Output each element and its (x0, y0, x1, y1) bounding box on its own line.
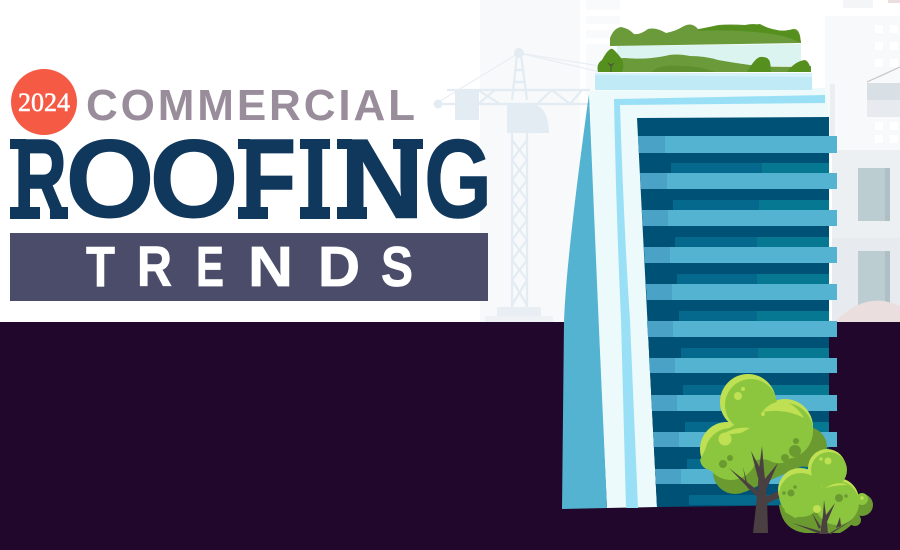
faint city skyline background (480, 0, 900, 322)
pale roof deck (617, 44, 801, 66)
heading: ROOFING (10, 116, 492, 242)
banner: TRENDS: S (381, 235, 413, 299)
right crane fragment (867, 67, 900, 117)
2024 badge (11, 69, 77, 135)
rear roof garden (610, 24, 801, 46)
light blue facade stripe (614, 95, 825, 508)
banner: TRENDS: D (318, 235, 360, 299)
mid-tone floor bands (671, 163, 829, 505)
left blue facade (562, 94, 607, 509)
large tree (700, 374, 827, 533)
dark purple ground band (0, 322, 900, 550)
heading: ROOFING: I (303, 116, 328, 242)
trunk and branches (792, 500, 852, 534)
heading: ROOFING: F (241, 116, 296, 242)
dark window block (637, 117, 829, 507)
heading: ROOFING: R (14, 116, 67, 242)
construction crane (434, 48, 600, 322)
white facade frame (590, 88, 829, 508)
front roof garden (598, 49, 811, 72)
heading: ROOFING: N (340, 116, 424, 242)
foliage (700, 374, 813, 480)
foliage highlights (718, 387, 801, 468)
heading: ROOFING: O (65, 116, 155, 242)
2024 badge: 2024 (18, 88, 70, 117)
foliage (778, 449, 868, 525)
foliage shadow (713, 427, 827, 494)
heading: ROOFING: O (149, 116, 239, 242)
roof parapet (595, 73, 812, 90)
foliage highlights (782, 457, 864, 513)
heading: COMMERCIAL: COMMERCIAL (86, 81, 415, 130)
heading: ROOFING: G (424, 116, 492, 242)
banner: TRENDS: N (248, 235, 293, 299)
foliage shadow (779, 490, 873, 533)
balcony floor slabs (638, 136, 837, 484)
banner: TRENDS: R (137, 235, 172, 299)
right background building (832, 150, 900, 322)
banner: TRENDS: T (86, 235, 115, 299)
banner: TRENDS: E (196, 235, 224, 299)
skyscraper with green roof (562, 24, 837, 509)
small tree (778, 449, 873, 534)
banner: TRENDS (10, 233, 488, 301)
trunk and branches (729, 446, 783, 533)
